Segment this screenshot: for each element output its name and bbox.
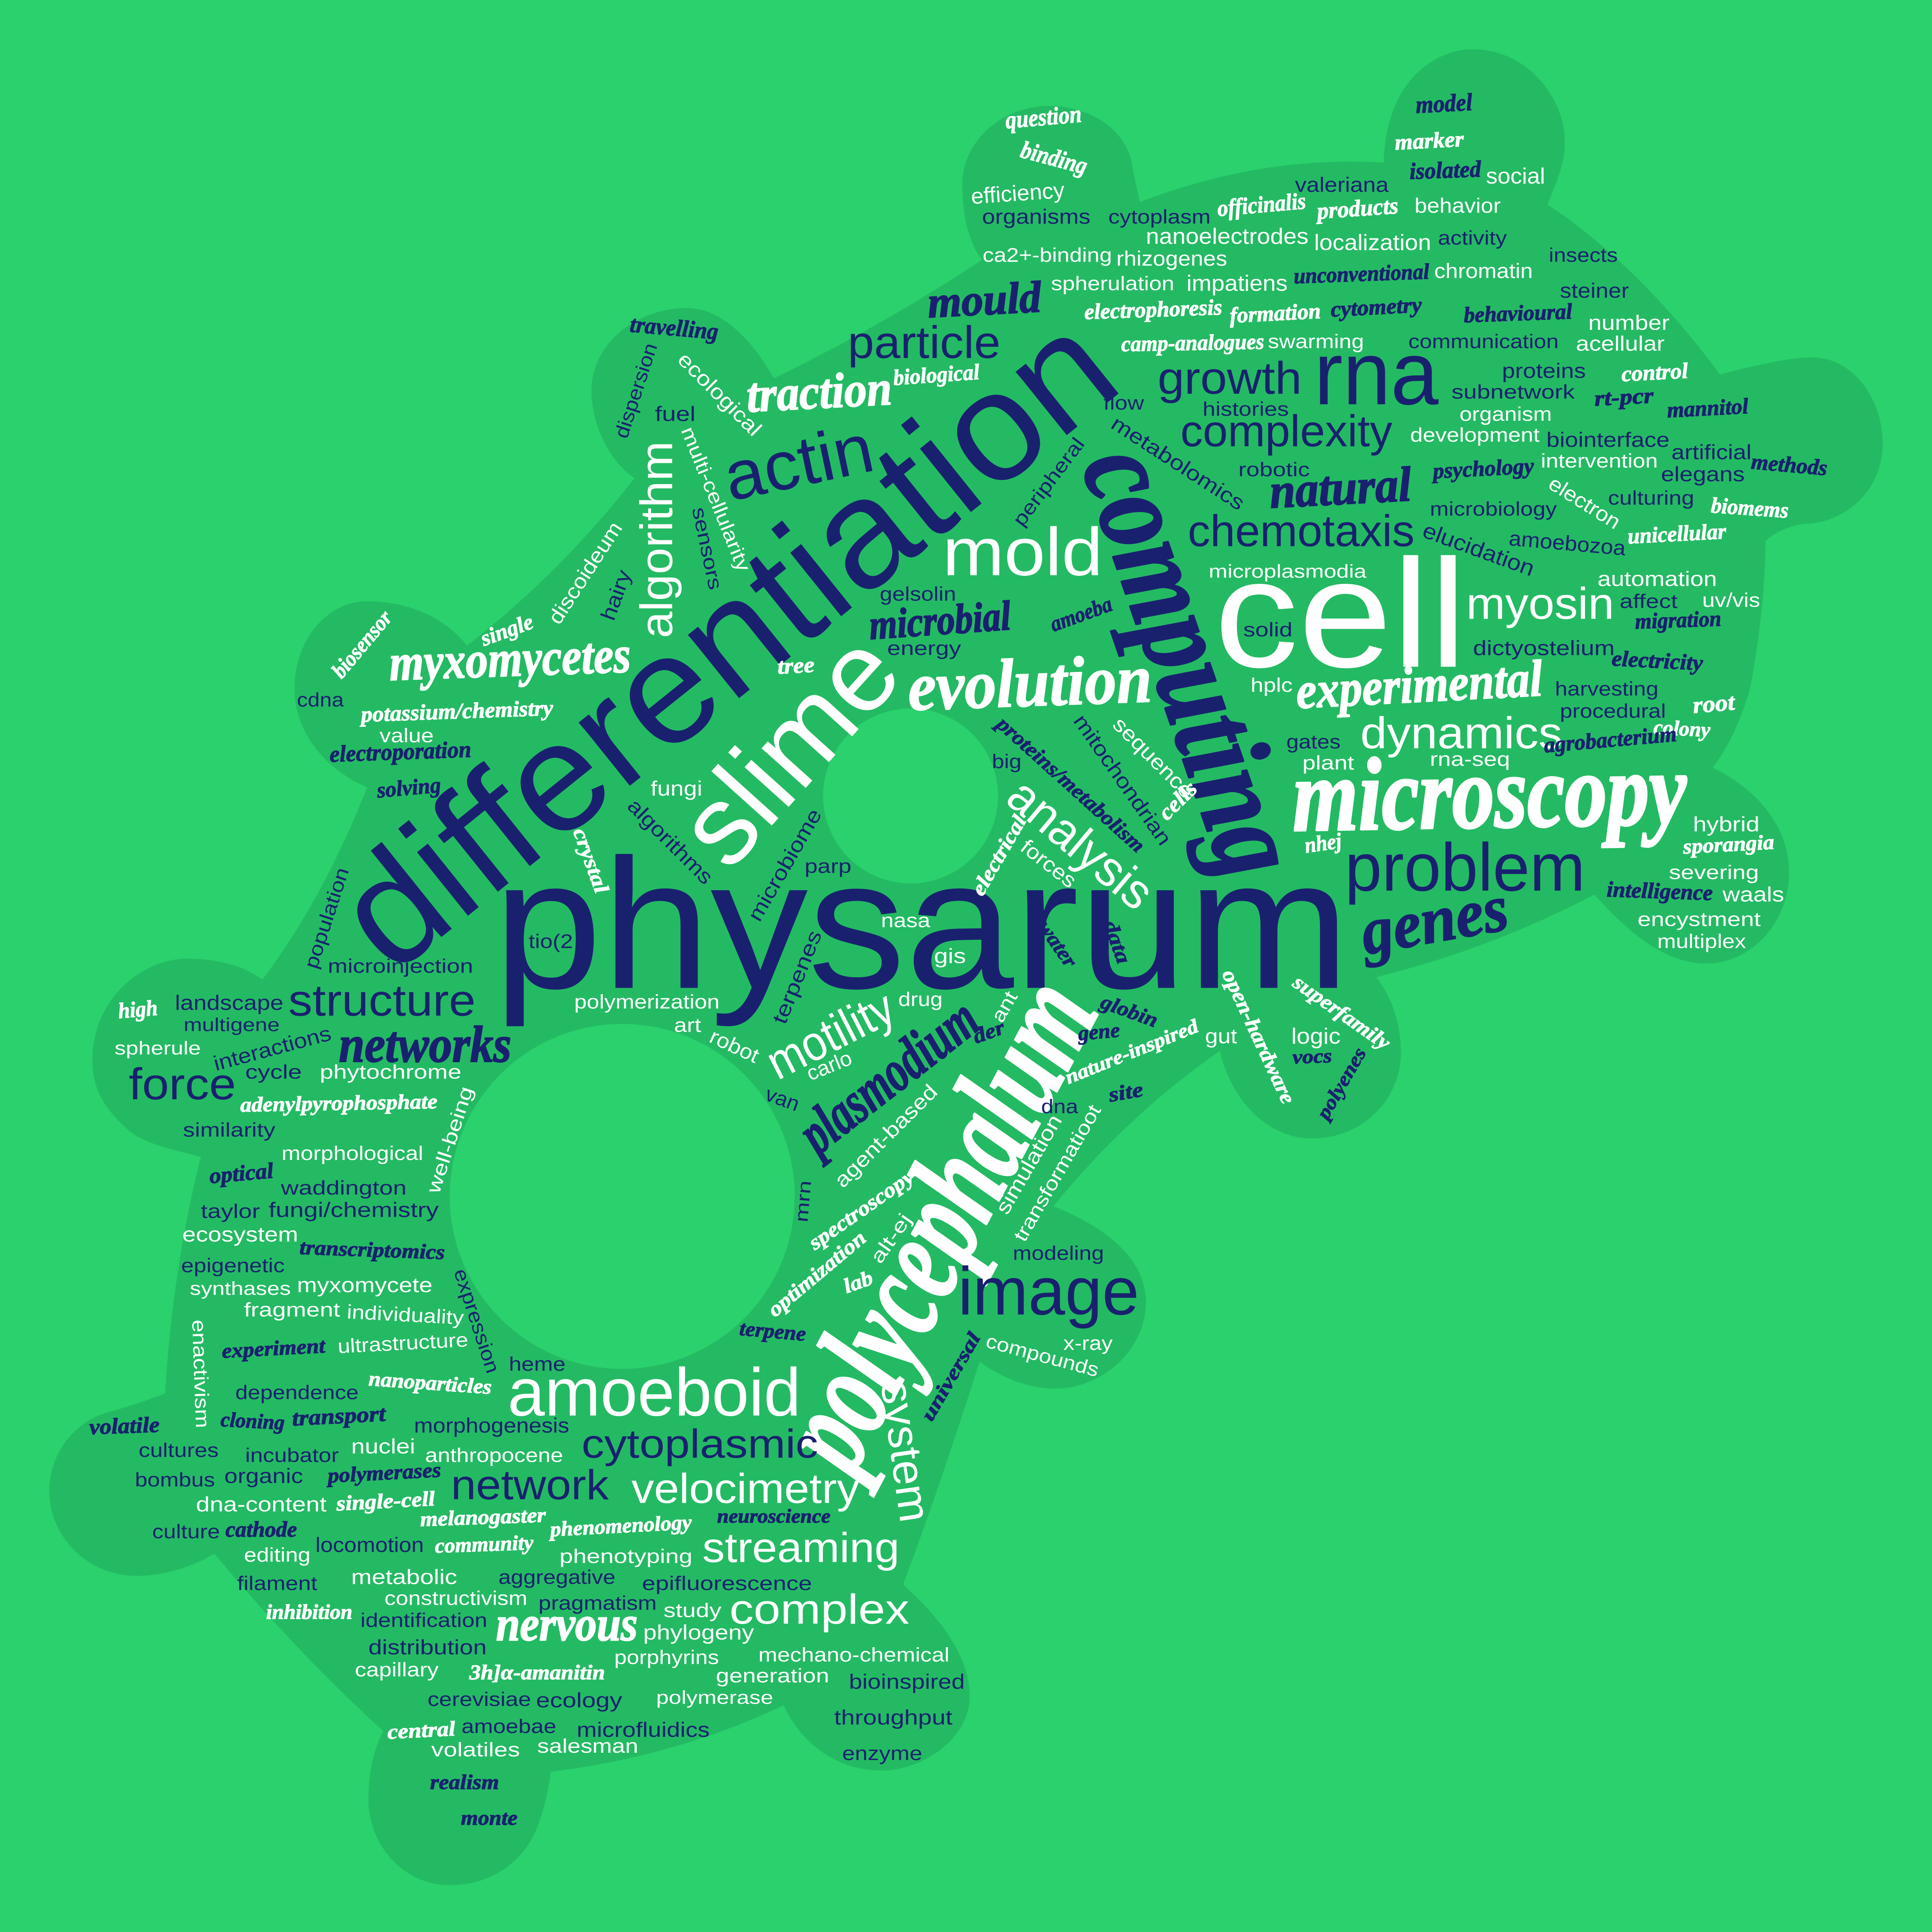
word: methods: methods: [1750, 449, 1828, 480]
word: ca2+-binding: ca2+-binding: [983, 244, 1112, 266]
word: unicellular: unicellular: [1627, 519, 1727, 549]
word: social: social: [1486, 164, 1545, 189]
word: analysis: analysis: [997, 767, 1164, 920]
word: hplc: hplc: [1251, 674, 1293, 696]
word: plasmodium: plasmodium: [784, 986, 991, 1168]
word: actin: actin: [717, 409, 880, 515]
word: bombus: bombus: [135, 1469, 215, 1491]
word: development: development: [1410, 424, 1539, 446]
word: steiner: steiner: [1560, 279, 1629, 303]
word: polycephalum: polycephalum: [743, 955, 1126, 1498]
word: throughput: throughput: [834, 1706, 952, 1729]
word: synthases: synthases: [190, 1279, 291, 1299]
word: nanoparticles: nanoparticles: [368, 1367, 492, 1399]
word: discoideum: discoideum: [544, 517, 627, 628]
word: landscape: landscape: [175, 992, 283, 1015]
word: tree: tree: [777, 653, 815, 679]
word: simulation: simulation: [991, 1111, 1066, 1218]
word: velocimetry: velocimetry: [631, 1465, 859, 1512]
word: sensors: sensors: [688, 505, 727, 592]
word: acellular: acellular: [1576, 332, 1665, 355]
word: fragment: fragment: [244, 1299, 340, 1321]
word: rna-seq: rna-seq: [1430, 748, 1510, 770]
word: site: site: [1106, 1078, 1145, 1107]
word: myxomycetes: myxomycetes: [388, 626, 632, 691]
word: binding: binding: [1018, 136, 1090, 180]
word: behavior: behavior: [1415, 194, 1501, 218]
word: community: community: [434, 1531, 534, 1558]
word: drug: drug: [898, 988, 942, 1010]
word: chemotaxis: chemotaxis: [1188, 506, 1415, 556]
word: single: single: [477, 609, 537, 651]
word: severing: severing: [1669, 861, 1759, 883]
word: microfluidics: microfluidics: [577, 1718, 710, 1742]
word: transcriptomics: transcriptomics: [299, 1236, 445, 1264]
word: population: population: [300, 865, 353, 971]
word: subnetwork: subnetwork: [1451, 381, 1575, 403]
word: gene: gene: [1077, 1018, 1121, 1045]
word: van: van: [762, 1082, 803, 1116]
word: amoebae: amoebae: [461, 1715, 556, 1737]
word: mold: mold: [942, 514, 1103, 590]
word: multigene: multigene: [184, 1015, 280, 1036]
word: amoeba: amoeba: [1047, 592, 1116, 636]
word: nuclei: nuclei: [351, 1435, 415, 1458]
word: pragmatism: pragmatism: [538, 1592, 657, 1614]
word: rhizogenes: rhizogenes: [1116, 247, 1227, 270]
word: gates: gates: [1286, 731, 1340, 753]
word: nasa: nasa: [881, 910, 930, 932]
word: culturing: culturing: [1608, 487, 1694, 509]
word: algorithm: algorithm: [631, 441, 682, 638]
word: agrobacterium: agrobacterium: [1543, 722, 1678, 758]
word: isolated: isolated: [1409, 156, 1482, 185]
word: morphological: morphological: [282, 1142, 423, 1164]
word: single-cell: single-cell: [335, 1487, 435, 1515]
word: aggregative: aggregative: [498, 1566, 616, 1588]
word: realism: realism: [430, 1770, 499, 1794]
word: intervention: intervention: [1541, 450, 1658, 472]
word: optical: optical: [208, 1158, 274, 1188]
word: mitochondrian: mitochondrian: [1069, 710, 1176, 850]
word: harvesting: harvesting: [1555, 678, 1658, 700]
word: rna: rna: [1314, 323, 1439, 423]
word: tio(2: tio(2: [529, 930, 573, 952]
word: art: art: [674, 1014, 701, 1036]
word: microscopy: microscopy: [1291, 731, 1688, 853]
word: dispersion: dispersion: [610, 340, 662, 441]
word: hybrid: hybrid: [1693, 813, 1760, 836]
word: proteins: proteins: [1502, 359, 1586, 383]
word: inhibition: inhibition: [266, 1600, 352, 1624]
word: parp: parp: [804, 855, 851, 877]
word: colony: colony: [1653, 716, 1711, 742]
word: cytometry: cytometry: [1330, 293, 1423, 322]
word: optimization: optimization: [763, 1226, 871, 1321]
word: well-being: well-being: [422, 1083, 477, 1196]
word: nervous: nervous: [496, 1596, 638, 1651]
word: hairy: hairy: [596, 567, 636, 623]
word: communication: communication: [1408, 330, 1559, 352]
word: number: number: [1588, 311, 1670, 334]
word: mannitol: mannitol: [1667, 394, 1749, 423]
hole: small: [823, 709, 998, 883]
word: fuel: fuel: [655, 402, 696, 425]
word: camp-analogues: camp-analogues: [1121, 330, 1264, 356]
word: adenylpyrophosphate: adenylpyrophosphate: [240, 1090, 437, 1116]
word: microplasmodia: microplasmodia: [1209, 561, 1367, 582]
word: agent-based: agent-based: [830, 1080, 942, 1192]
word: electrical: electrical: [966, 811, 1031, 900]
word: gut: gut: [1205, 1025, 1237, 1048]
word: locomotion: locomotion: [315, 1534, 424, 1557]
word: organism: organism: [1459, 403, 1552, 425]
word: psychology: psychology: [1430, 454, 1535, 483]
word: 3h]α-amanitin: 3h]α-amanitin: [469, 1661, 605, 1684]
word: chromatin: chromatin: [1434, 260, 1533, 283]
word: amoebozoa: amoebozoa: [1508, 527, 1627, 560]
word: culture: culture: [152, 1520, 220, 1543]
word: individuality: individuality: [346, 1301, 464, 1329]
word: amoeboid: amoeboid: [508, 1354, 801, 1430]
word: computing: computing: [1056, 429, 1330, 893]
word: cdna: cdna: [297, 689, 344, 711]
word: ecological: ecological: [673, 348, 766, 441]
word: swarming: swarming: [1268, 330, 1364, 352]
word: terpenes: terpenes: [768, 927, 827, 1027]
word: transformatioot: transformatioot: [1009, 1101, 1105, 1245]
word: cytoplasmic: cytoplasmic: [582, 1422, 818, 1467]
word: flow: flow: [1104, 392, 1144, 414]
word: spherule: spherule: [115, 1038, 201, 1059]
word: evolution: evolution: [906, 640, 1153, 725]
word: logic: logic: [1291, 1024, 1340, 1049]
word: experiment: experiment: [221, 1334, 327, 1362]
word: incubator: incubator: [245, 1444, 339, 1466]
word: epigenetic: epigenetic: [181, 1254, 285, 1276]
word: streaming: streaming: [702, 1524, 900, 1571]
word: morphogenesis: morphogenesis: [414, 1414, 569, 1437]
word: gelsolin: gelsolin: [880, 583, 956, 605]
word: peripheral: peripheral: [1008, 433, 1089, 530]
word: algorithms: algorithms: [623, 794, 718, 889]
word: biointerface: biointerface: [1546, 428, 1670, 451]
word: microbial: microbial: [867, 592, 1012, 648]
word: electron: electron: [1544, 472, 1625, 534]
word: myxomycete: myxomycete: [297, 1274, 432, 1297]
word: biological: biological: [893, 360, 980, 390]
word: polymerization: polymerization: [574, 991, 719, 1013]
word: histories: histories: [1202, 398, 1289, 420]
word: root: root: [1692, 689, 1736, 719]
word: waddington: waddington: [281, 1177, 406, 1199]
word: artificial: artificial: [1672, 440, 1752, 464]
word: volatile: volatile: [89, 1413, 160, 1439]
word: natural: natural: [1268, 456, 1413, 519]
word: network: network: [451, 1461, 609, 1508]
word: behavioural: behavioural: [1463, 299, 1573, 327]
word: enzyme: enzyme: [842, 1742, 922, 1764]
word: microinjection: microinjection: [328, 955, 473, 977]
word: efficiency: efficiency: [970, 178, 1065, 209]
word: electrophoresis: electrophoresis: [1084, 295, 1223, 324]
word: mould: mould: [926, 272, 1043, 327]
word: products: products: [1314, 193, 1399, 224]
word: epifluorescence: epifluorescence: [642, 1572, 812, 1594]
word: cells: cells: [1153, 776, 1202, 825]
word: migration: migration: [1634, 607, 1722, 634]
word: lab: lab: [840, 1266, 876, 1298]
word: slime: slime: [653, 609, 924, 889]
word: force: force: [129, 1060, 236, 1109]
word: system: system: [871, 1378, 940, 1525]
word: globin: globin: [1097, 990, 1161, 1032]
word: capillary: capillary: [355, 1658, 439, 1680]
word: polymerase: polymerase: [656, 1688, 773, 1708]
word: electroporation: electroporation: [329, 736, 472, 767]
word: transport: transport: [291, 1401, 387, 1431]
word: ant: ant: [986, 987, 1022, 1026]
word: networks: networks: [339, 1016, 511, 1073]
word: modeling: modeling: [1013, 1242, 1104, 1264]
word: compounds: compounds: [984, 1330, 1101, 1381]
word: structure: structure: [288, 976, 476, 1025]
word: constructivism: constructivism: [384, 1587, 527, 1609]
word: distribution: distribution: [368, 1636, 487, 1659]
word: monte: monte: [461, 1806, 517, 1829]
word: phytochrome: phytochrome: [320, 1061, 461, 1083]
word: editing: editing: [244, 1544, 311, 1566]
word: phenomenology: phenomenology: [548, 1510, 692, 1541]
word: dna: dna: [1041, 1095, 1078, 1117]
word: elucidation: elucidation: [1419, 518, 1538, 581]
word: plant: plant: [1303, 752, 1354, 774]
word: cycle: cycle: [245, 1061, 302, 1083]
word: complexity: complexity: [1180, 406, 1393, 456]
word: biosensor: biosensor: [327, 605, 397, 683]
word: model: model: [1415, 88, 1473, 119]
word: study: study: [663, 1599, 722, 1621]
word: gis: gis: [934, 944, 966, 968]
word: automation: automation: [1597, 568, 1717, 591]
word: myosin: myosin: [1466, 579, 1614, 628]
word: particle: particle: [848, 317, 1000, 368]
word: dependence: dependence: [235, 1381, 359, 1403]
word: marker: marker: [1394, 127, 1464, 155]
word: melanogaster: melanogaster: [420, 1503, 546, 1531]
word: ecosystem: ecosystem: [182, 1223, 298, 1246]
word: procedural: procedural: [1560, 700, 1666, 722]
word: crystal: crystal: [568, 825, 614, 896]
word: solid: solid: [1243, 619, 1293, 641]
word: cytoplasm: cytoplasm: [1108, 206, 1211, 228]
word: dna-content: dna-content: [196, 1493, 327, 1516]
word: mrn: mrn: [791, 1180, 815, 1223]
word: nhej: nhej: [1303, 828, 1344, 858]
word: open-hardware: open-hardware: [1218, 966, 1300, 1107]
word: cathode: cathode: [226, 1517, 297, 1542]
word: microbiome: microbiome: [743, 805, 827, 925]
word: filament: filament: [237, 1572, 317, 1594]
word: fungi: fungi: [651, 777, 702, 800]
word: insects: insects: [1549, 244, 1618, 266]
word: complex: complex: [730, 1586, 909, 1633]
word: solving: solving: [376, 773, 442, 803]
word: rt-pcr: rt-pcr: [1594, 383, 1654, 411]
word: cloning: cloning: [220, 1408, 285, 1434]
word: carlo: carlo: [803, 1046, 855, 1085]
word: vocs: vocs: [1292, 1045, 1332, 1068]
word: expression: expression: [450, 1266, 504, 1376]
word: metabolic: metabolic: [351, 1566, 457, 1589]
word: bioinspired: bioinspired: [849, 1670, 965, 1694]
word: ecology: ecology: [536, 1689, 622, 1712]
word: valeriana: valeriana: [1295, 173, 1389, 196]
word: superfamily: superfamily: [1288, 970, 1395, 1054]
word: proteins/metabolism: proteins/metabolism: [991, 711, 1150, 857]
word: taylor: taylor: [201, 1200, 260, 1222]
word: elegans: elegans: [1661, 463, 1745, 486]
word: robot: robot: [706, 1025, 763, 1068]
word: value: value: [379, 724, 434, 747]
word: ultrastructure: ultrastructure: [337, 1328, 469, 1357]
word: sporangia: sporangia: [1682, 830, 1775, 858]
word: forces: forces: [1016, 835, 1081, 893]
word: traction: traction: [745, 360, 893, 423]
word: cell: cell: [1214, 528, 1467, 700]
word: anthropocene: anthropocene: [425, 1444, 563, 1466]
word: officinalis: officinalis: [1216, 188, 1307, 222]
word: water: water: [1033, 916, 1082, 972]
word: universal: universal: [917, 1328, 985, 1425]
word: big: big: [992, 750, 1021, 772]
word: phenotyping: phenotyping: [560, 1545, 692, 1567]
word: waals: waals: [1722, 883, 1784, 906]
word: central: central: [387, 1717, 456, 1743]
word: unconventional: unconventional: [1293, 259, 1430, 289]
word: porphyrins: porphyrins: [614, 1646, 719, 1668]
word: physarum: physarum: [493, 821, 1350, 1028]
word: data: data: [1099, 917, 1136, 967]
word: polymerases: polymerases: [325, 1458, 442, 1487]
word: neuroscience: neuroscience: [717, 1505, 830, 1527]
word: uv/vis: uv/vis: [1702, 589, 1760, 611]
word: problem: problem: [1345, 830, 1585, 905]
word: localization: localization: [1314, 230, 1431, 255]
word: activity: activity: [1438, 227, 1507, 249]
word: polyenes: polyenes: [1312, 1044, 1371, 1124]
word: mechano-chemical: mechano-chemical: [759, 1644, 949, 1666]
word: organisms: organisms: [982, 205, 1090, 228]
word: salesman: salesman: [537, 1735, 638, 1757]
word: multiplex: multiplex: [1657, 930, 1746, 952]
word: dictyostelium: dictyostelium: [1473, 636, 1615, 660]
word: experimental: experimental: [1294, 650, 1544, 719]
word: potassium/chemistry: potassium/chemistry: [359, 696, 554, 727]
word: enactivism: enactivism: [188, 1319, 214, 1429]
word: fungi/chemistry: fungi/chemistry: [269, 1198, 439, 1221]
word: intelligence: intelligence: [1606, 877, 1713, 905]
word: interactions: interactions: [211, 1022, 333, 1075]
word: identification: identification: [361, 1609, 487, 1631]
word: robotic: robotic: [1238, 458, 1310, 480]
word: alt-ej: alt-ej: [866, 1209, 916, 1267]
word: motility: motility: [758, 980, 903, 1090]
word: differentiation: differentiation: [304, 279, 1147, 1003]
word: terpene: terpene: [738, 1316, 807, 1345]
word: genes: genes: [1354, 871, 1514, 969]
word: encystment: encystment: [1638, 908, 1761, 930]
word: cultures: cultures: [139, 1439, 219, 1461]
word: affect: affect: [1620, 590, 1678, 612]
word: microbiology: microbiology: [1430, 498, 1557, 520]
word: dynamics: dynamics: [1360, 708, 1562, 758]
word: image: image: [958, 1253, 1139, 1329]
word: nanoelectrodes: nanoelectrodes: [1146, 224, 1308, 249]
word: travelling: travelling: [629, 311, 719, 345]
word: biomems: biomems: [1710, 493, 1789, 523]
word: energy: energy: [887, 637, 961, 659]
word: heme: heme: [509, 1353, 566, 1375]
word: nature-inspired: nature-inspired: [1062, 1015, 1202, 1088]
word: control: control: [1621, 359, 1689, 386]
word: spectroscopy: spectroscopy: [804, 1164, 919, 1255]
word: x-ray: x-ray: [1063, 1332, 1113, 1354]
word: volatiles: volatiles: [431, 1739, 520, 1761]
hole: large: [450, 1024, 795, 1369]
word: spherulation: spherulation: [1051, 272, 1174, 294]
word: multi-cellularity: multi-cellularity: [677, 423, 755, 575]
word: phylogeny: phylogeny: [643, 1621, 754, 1644]
word: metabolomics: metabolomics: [1107, 412, 1249, 515]
word: formation: formation: [1229, 299, 1321, 328]
word: electricity: electricity: [1611, 646, 1704, 675]
word: high: high: [117, 996, 158, 1024]
word: generation: generation: [716, 1665, 829, 1687]
word: cerevisiae: cerevisiae: [428, 1688, 531, 1710]
word: organic: organic: [224, 1464, 303, 1488]
word: impatiens: impatiens: [1187, 271, 1287, 296]
word: der: der: [969, 1015, 1008, 1048]
word: growth: growth: [1158, 353, 1302, 404]
word: similarity: similarity: [183, 1119, 276, 1141]
word: sequence: sequence: [1108, 713, 1199, 803]
word: question: question: [1004, 100, 1083, 134]
